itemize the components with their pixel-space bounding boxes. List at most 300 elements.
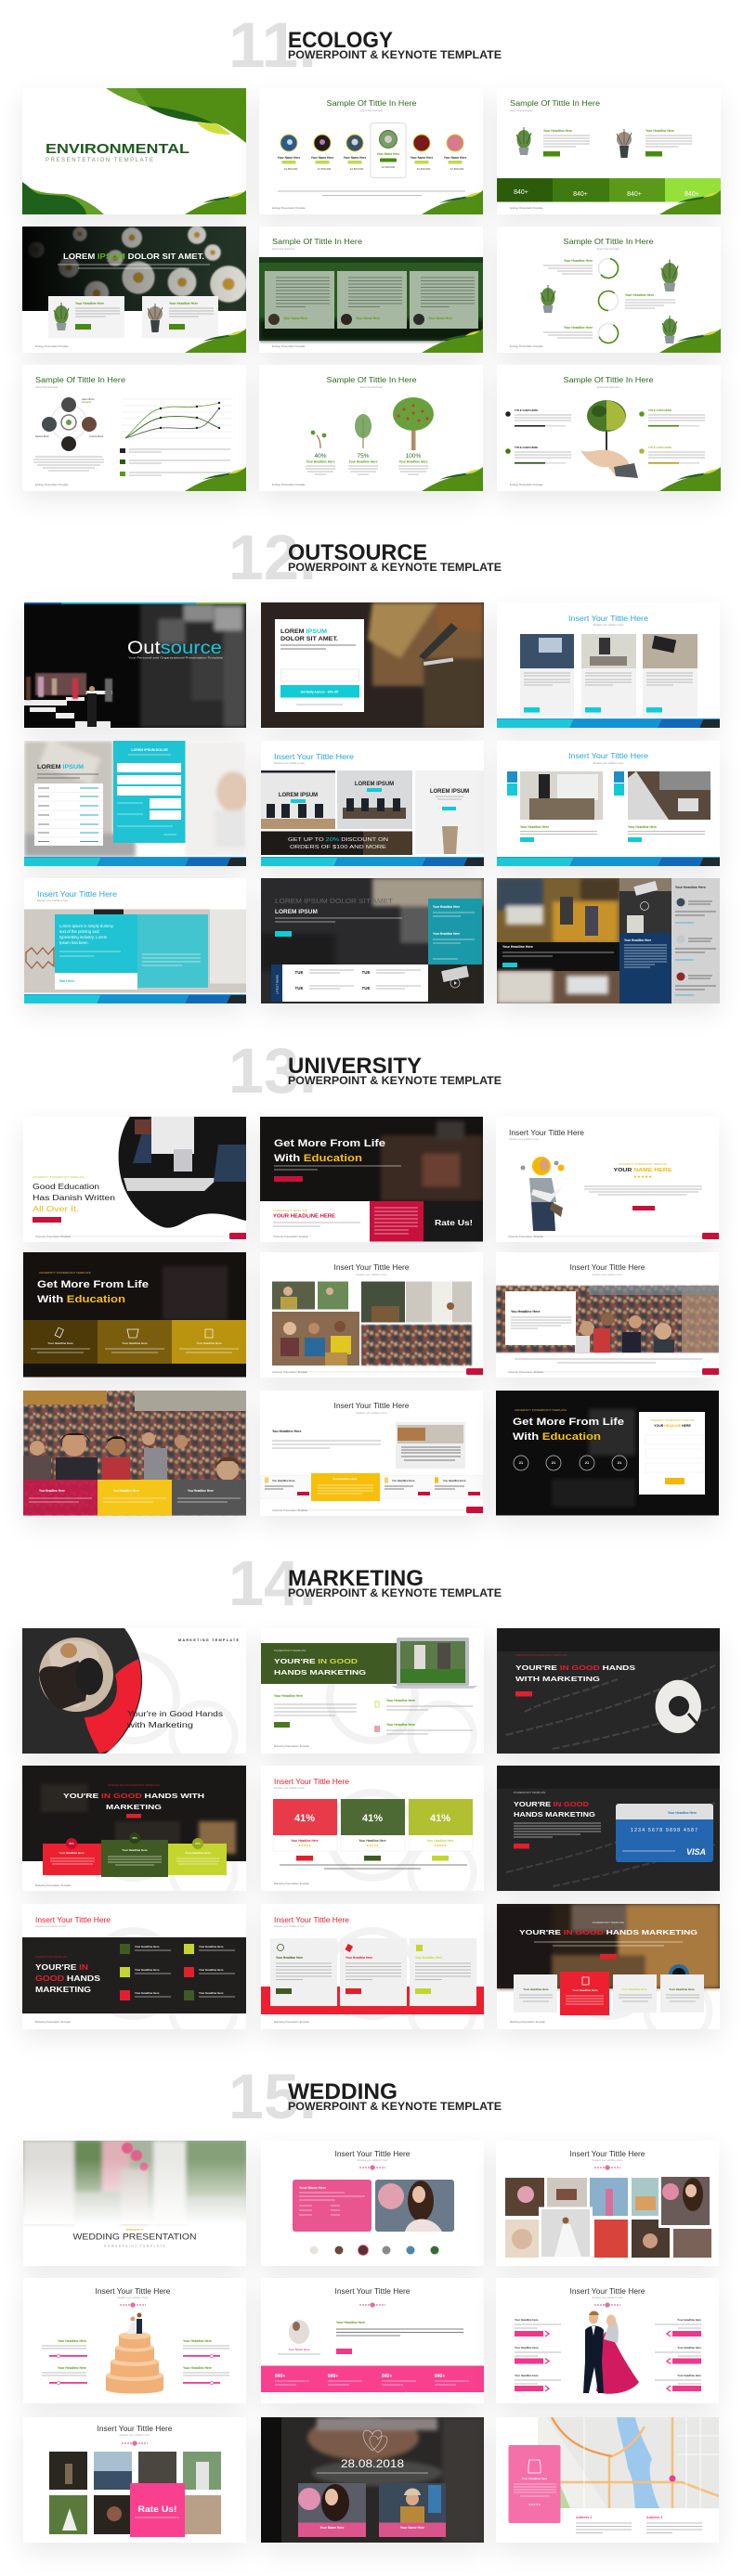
percentages (314, 453, 422, 460)
slide: tree growth: Insert Your Text Here (360, 385, 384, 389)
slide: countdown form: 21 (618, 1460, 622, 1465)
slide: desk photo cards: Marketing Presentation Template (509, 2020, 545, 2024)
logo: Out source (127, 639, 222, 658)
headline: YOU'RE IN GOOD HANDS WITH (63, 1792, 204, 1800)
addresses: Address 2 (646, 2516, 662, 2519)
ring notes: Your Headline Here (625, 293, 654, 297)
headline: LOREM IPSUM DOLOR SIT AMET. (63, 252, 204, 261)
couple illustration (583, 2311, 639, 2394)
headline: Get More From Life (513, 1417, 624, 1428)
rate us panel: Rate Us! (435, 1219, 473, 1227)
form card: YOUR HEADLINE HERE (654, 1424, 692, 1428)
navy column: Your Headline Here (624, 938, 651, 942)
headline: with Marketing (126, 1721, 193, 1729)
percentages: 40% (314, 453, 327, 460)
discount banner: ORDERS OF $100 AND MORE (290, 845, 386, 850)
right notes: Your Headline Here (183, 2339, 212, 2343)
cover subtitle: PRESENTETAION TEMPLATE (46, 158, 153, 163)
form panel: LOREM IPSUM DOLOR (131, 748, 168, 752)
slide: dark band icons: Replace your subtitle in here (35, 1924, 66, 1928)
title: Insert Your Tittle Here (37, 890, 118, 899)
photo 2 (337, 770, 412, 829)
left items: TITLE GOES HERE (515, 408, 538, 412)
daisy photo (22, 226, 247, 311)
green card: Your Headline Here (122, 1848, 148, 1852)
green banner: YOUR'RE IN GOOD (274, 1657, 358, 1665)
headline (33, 1183, 115, 1213)
colored panels: You Headline Here (188, 1489, 214, 1493)
team network: Adam Bush (82, 397, 95, 401)
left items: Your Headline Here (515, 2374, 539, 2377)
top strip (24, 602, 246, 604)
dark background (496, 1766, 719, 1891)
man figure (520, 1157, 565, 1231)
slide: laptop banner: Marketing Presentation Template (274, 1744, 309, 1748)
card 3: Your Headline Here (415, 1956, 442, 1960)
grey sidebar: Your Headline Here (675, 886, 706, 889)
photo 3 (415, 770, 484, 854)
pills (282, 158, 463, 163)
credit card: 1234 5678 9898 4587 (630, 1828, 697, 1833)
names: Your Name Here (444, 156, 467, 160)
slide: network and chart (22, 365, 246, 491)
left items (515, 2318, 561, 2391)
headline: Has Danish Written (33, 1194, 115, 1202)
captions (306, 460, 428, 464)
right items: TITLE GOES HERE (648, 446, 671, 449)
captions: Your Headline Here (358, 1839, 386, 1843)
gold panels: Your Headline Here (196, 1341, 222, 1345)
headline: YOUR'RE IN (35, 1963, 88, 1972)
title: Insert Your Tittle Here (95, 2287, 171, 2296)
headline: MARKETING (35, 1986, 91, 1994)
slide: bride profile: Replace your subtitle in here (358, 2158, 388, 2162)
magnifier (655, 1680, 700, 1733)
right items: Your Headline Here (677, 2318, 701, 2322)
welcome: Welcome to (126, 2228, 143, 2232)
title: Sample Of Tittle In Here (563, 238, 654, 246)
people on puzzle (24, 673, 112, 728)
headline (274, 1138, 385, 1164)
feature cards: You Headline Here (392, 1479, 415, 1482)
names (278, 152, 467, 160)
black caption: Your Headline Here (502, 945, 533, 949)
section: university (20, 1044, 723, 1528)
tagline: UNIVERSITY POWERPOINT TEMPLATE (39, 1271, 91, 1275)
news panel: TUE (295, 970, 303, 975)
right features: Your Headline Here (386, 1723, 415, 1727)
slide: photo collage: Replace your subtitle in here (357, 1273, 387, 1276)
slide: 41 percent tiles (261, 1766, 484, 1891)
ring charts (595, 257, 621, 346)
card row: Your Headline Here (621, 1987, 647, 1991)
dark photo (261, 878, 484, 1003)
slide: cake (23, 2278, 246, 2403)
left items: Your Headline Here (515, 2346, 539, 2349)
groom card (379, 2483, 446, 2537)
gold panels (23, 1320, 246, 1364)
blurred photo (24, 739, 250, 857)
text block (272, 1430, 381, 1448)
form panel (113, 741, 186, 843)
date: 28.08.2018 (341, 2457, 404, 2470)
headline: YOUR'RE IN GOOD (513, 1800, 589, 1808)
slide: hand holding tree: Ecology Presentation Template (510, 483, 543, 486)
left notes: Your Headline Here (58, 2366, 86, 2370)
desk photo (497, 878, 619, 943)
tagline: UNIVERSITY POWERPOINT TEMPLATE (515, 1408, 567, 1412)
slide: two photos (497, 741, 720, 866)
groom card: Your Name Here (400, 2526, 424, 2530)
portrait (278, 2320, 320, 2354)
ring notes: Your Headline Here (564, 326, 593, 330)
photo 1: LOREM IPSUM (279, 793, 318, 798)
video photo (428, 964, 482, 1002)
headline: YOUR'RE IN GOOD HANDS MARKETING (518, 1928, 697, 1936)
credit card: Your Headline Here (667, 1811, 697, 1815)
card 1 (270, 1938, 337, 2006)
tagline: UNIVERSITY POWERPOINT TEMPLATE (33, 1175, 85, 1179)
right items (639, 408, 705, 464)
framed dress (539, 2207, 593, 2259)
red quote (370, 1201, 424, 1242)
news panel: TUE (295, 986, 303, 990)
slide: progress rings: Insert Your Text Here (597, 247, 620, 251)
crowd photo (496, 1286, 719, 1353)
card row (513, 1972, 704, 2015)
left notes (42, 2339, 87, 2385)
captions (291, 1839, 454, 1847)
title: Insert Your Tittle Here (274, 753, 355, 761)
schedule table (34, 783, 103, 846)
signup card: LOREM IPSUM (280, 628, 327, 635)
buttons (296, 1856, 449, 1860)
title: Insert Your Tittle Here (274, 1778, 350, 1786)
prices (284, 165, 464, 171)
card 3 (410, 1938, 476, 2006)
plant right (617, 129, 632, 158)
slide: testimonials: Insert Your Text Here (272, 247, 295, 251)
green leaf top right (106, 88, 246, 143)
names: Your Name Here (377, 152, 400, 156)
slide: red band cards: Replace your subtitle in here (274, 1924, 305, 1928)
slide: credit card (496, 1766, 719, 1891)
right items: Your Headline Here (677, 2374, 701, 2377)
slide: team row: Ecology Presentation Template (272, 206, 306, 210)
stat strip: 840+ (573, 191, 588, 198)
avatars: Your Name Here (428, 317, 452, 320)
slide: man with book: Replace your subtitle in here (509, 1137, 540, 1141)
heading: 14 marketing: MARKETING (288, 1566, 424, 1591)
lime card: Your Headline Here (185, 1851, 211, 1855)
news panel: LATEST NEWS (275, 975, 279, 994)
heading: 12 outsource: OUTSOURCE (288, 540, 427, 565)
copy (336, 2321, 463, 2354)
icon captions: Your Headline Here (199, 1945, 224, 1948)
green banner (261, 1643, 397, 1684)
title: Insert Your Tittle Here (97, 2425, 173, 2433)
title: Sample Of Tittle In Here (563, 376, 654, 384)
slide: gallery (496, 2141, 719, 2266)
slide: progress rings (497, 227, 721, 353)
slide: blog layout (497, 878, 720, 1003)
slide: text and cards: Replace your subtitle in here (357, 1411, 387, 1415)
rate us panel (424, 1201, 483, 1242)
slide: latest news (261, 878, 484, 1003)
dark photo (260, 1117, 483, 1201)
name block: YOUR NAME HERE (613, 1168, 672, 1173)
heading: 15 wedding: POWERPOINT & KEYNOTE TEMPLATE (288, 2100, 502, 2113)
subtitle: Insert Your Text Here (360, 109, 384, 112)
slide: wedding cover (23, 2141, 246, 2266)
tree in hand (580, 400, 638, 478)
credit card: VISA (685, 1847, 706, 1857)
tagline: Your Personal and Organizational Presentation Template (128, 655, 223, 659)
feature cards: You Headline Here (443, 1479, 466, 1482)
left text (274, 1694, 357, 1728)
subtitle: POWERPOINT TEMPLATE (104, 2245, 165, 2248)
news panel (271, 964, 428, 1002)
cake tiers (106, 2332, 163, 2393)
headline: POWERPOINT TEMPLATE (35, 1955, 67, 1959)
headline: Get More From Life (274, 1138, 385, 1149)
profile circles (280, 130, 463, 151)
red band (261, 1987, 484, 2014)
heading: 13 university: UNIVERSITY (288, 1054, 422, 1079)
green banner: POWERPOINT TEMPLATE (274, 1649, 306, 1652)
heading: 12 outsource (228, 529, 502, 593)
photo 1 (261, 770, 335, 829)
captions: ★★★★★ (297, 1844, 311, 1847)
headline: POWERPOINT TEMPLATE (513, 1791, 545, 1794)
text block left: Your Headline Here (543, 129, 572, 133)
heading: 11 ecology: POWERPOINT & KEYNOTE TEMPLATE (288, 48, 502, 61)
slide: rate us (260, 1117, 483, 1242)
title: Insert Your Tittle Here (334, 1402, 410, 1410)
slide: environmental cover (22, 88, 246, 214)
cyan panel: Ipsum has been. (59, 940, 89, 945)
slide: audience with panels (23, 1391, 246, 1515)
right items: Your Headline Here (677, 2346, 701, 2349)
teal panel (428, 899, 482, 964)
form card: UNIVERSITY POWERPOINT TEMPLATE (650, 1418, 695, 1422)
slide: man with book (496, 1117, 719, 1242)
quote cards (265, 271, 478, 329)
pink card (293, 2180, 372, 2232)
captions: Your Headline Here (306, 460, 335, 464)
icon captions: Your Headline Here (135, 1945, 160, 1948)
prices: 12.500.000 (318, 167, 332, 171)
bride photo (375, 2180, 454, 2232)
card 2 (142, 296, 218, 338)
line chart (122, 399, 232, 438)
avatars: Your Name Here (356, 317, 380, 320)
captions: Your Headline Here (520, 825, 549, 829)
slide: laptop banner (261, 1628, 484, 1754)
news panel: TUE (362, 970, 370, 975)
heading: 14 marketing: POWERPOINT & KEYNOTE TEMPLATE (288, 1586, 502, 1599)
photo blob (119, 1117, 246, 1228)
slide: overlapping panels (24, 878, 246, 1003)
feature cards: You Headline Here (272, 1479, 295, 1482)
captions: ★★★★★ (433, 1844, 447, 1847)
faint ring (91, 1655, 235, 1767)
card 1: Your Headline Here (276, 1956, 303, 1960)
slide: date (261, 2417, 484, 2543)
signup card: DOLOR SIT AMET. (280, 636, 338, 642)
avatars (268, 314, 452, 325)
left notes: Your Headline Here (58, 2339, 86, 2343)
tagline: MARKETING TEMPLATE (178, 1638, 239, 1642)
plant left (516, 127, 531, 155)
section: wedding (20, 2070, 723, 2555)
sapling (355, 414, 372, 448)
green banner: HANDS MARKETING (274, 1668, 366, 1676)
green card: 98% (132, 1836, 137, 1840)
headline (35, 1955, 101, 1994)
lower photo (497, 971, 619, 1003)
title: Insert Your Tittle Here (570, 2150, 645, 2158)
pink band: 840+ (275, 2374, 285, 2379)
slide: 41 percent tiles: Marketing Presentation Template (274, 1882, 309, 1885)
names: Your Name Here (344, 156, 367, 160)
discount banner (261, 832, 412, 855)
headline: GOOD HANDS (35, 1974, 101, 1983)
floral dark photo (261, 2415, 484, 2543)
right items (655, 2318, 701, 2391)
ring notes: Your Headline Here (564, 259, 593, 263)
slide: hand holding tree: Insert Your Text Here (597, 385, 620, 389)
feature cards: You Headline Here (332, 1477, 358, 1481)
white card: You Headline Here (511, 1310, 541, 1314)
title: Sample Of Tittle In Here (327, 99, 416, 108)
desk photo (261, 602, 484, 728)
heading: LOREM IPSUM (37, 764, 84, 770)
crowd photo (23, 1391, 246, 1515)
slide: countdown form: 21 (552, 1460, 556, 1465)
card 2: Your Headline Here (345, 1956, 372, 1960)
black caption (497, 942, 619, 971)
title: Insert Your Tittle Here (334, 2287, 411, 2296)
signup card: Get Early Access - 10% Off (301, 691, 339, 694)
tile cards (273, 1799, 473, 1851)
slide: bride and groom (496, 2278, 719, 2403)
right notes (183, 2339, 229, 2385)
red card: 85% (69, 1842, 74, 1845)
framed bride (658, 2174, 712, 2228)
addresses (576, 2516, 702, 2532)
prices: 12.500.000 (417, 167, 431, 171)
icon captions (135, 1945, 224, 1995)
tagline: MARKETING POWERPOINT TEMPLATE (515, 1653, 567, 1657)
title: Insert Your Tittle Here (568, 752, 649, 760)
slide: pink stat band (261, 2278, 484, 2403)
names: Your Name Here (411, 156, 434, 160)
slide: magnifier: WITH MARKETING (515, 1675, 600, 1683)
slide: red band cards (261, 1904, 484, 2029)
slide: team row (259, 88, 483, 214)
title: Insert Your Tittle Here (568, 615, 649, 623)
red crescent (85, 1659, 141, 1754)
slide: hand holding tree (497, 365, 721, 491)
prices: 12.500.000 (450, 167, 464, 171)
slide: map (496, 2417, 719, 2543)
heading: 14 marketing (228, 1555, 502, 1619)
dark background (496, 1391, 719, 1515)
text block right: Your Headline Here (645, 129, 674, 133)
news panel: TUE (362, 986, 370, 990)
slide: outsource cover (24, 602, 246, 728)
highlighted card (371, 123, 406, 178)
card 1 (48, 296, 124, 338)
captions: Your Headline Here (291, 1839, 319, 1843)
teal panel: Your Headline Here (433, 932, 460, 936)
couple topper (127, 2313, 142, 2334)
addresses: Address 1 (576, 2516, 592, 2519)
slide: countdown form (496, 1391, 719, 1515)
photo right (628, 771, 710, 820)
percentages (294, 1813, 450, 1824)
pink band (261, 2365, 484, 2392)
slide: three cards: Replace your subtitle in here (593, 623, 624, 627)
countdown circles (514, 1456, 627, 1470)
tagline: MARKETING POWERPOINT TEMPLATE (108, 1783, 160, 1787)
captions: ★★★★★ (365, 1844, 379, 1847)
portrait: Your Name Here (288, 2348, 310, 2351)
rate us card: Rate Us! (137, 2505, 176, 2514)
slide: countdown form: 21 (585, 1460, 590, 1465)
bride card (298, 2483, 366, 2537)
percentages: 41% (294, 1813, 315, 1824)
title: Sample Of Tittle In Here (510, 99, 600, 108)
team network: Designer (82, 400, 92, 404)
pink band: 840+ (435, 2374, 445, 2379)
team network: Jessica Bush (89, 434, 104, 438)
headline: With Education (513, 1431, 601, 1443)
slide: rate us: University Presentation Template (273, 1235, 308, 1238)
heading: 13 university (228, 1044, 502, 1107)
headline (513, 1791, 600, 1849)
slide: dark band icons: Marketing Presentation Template (35, 2020, 71, 2024)
heading: 15 wedding (228, 2070, 502, 2132)
slide: progress rings: Ecology Presentation Template (510, 344, 543, 348)
signup card (275, 619, 364, 712)
slide: daisies: Ecology Presentation Template (35, 344, 69, 348)
title: Insert Your Tittle Here (274, 1916, 350, 1924)
percentages: 41% (362, 1813, 383, 1824)
cover title: ENVIRONMENTAL (46, 141, 189, 157)
slide: gold panels (23, 1252, 246, 1378)
stat strip: 840+ (627, 191, 642, 198)
slide: cake: Replace your subtitle in here (118, 2296, 149, 2299)
translucent panel (137, 914, 208, 988)
title: Insert Your Tittle Here (35, 1916, 111, 1924)
slide: 41 percent tiles: Replace your subtitle in here (274, 1786, 305, 1790)
title: Sample Of Tittle In Here (35, 376, 125, 384)
gold panels: Your Headline Here (47, 1341, 73, 1345)
headline: All Over It. (33, 1205, 79, 1213)
headline (126, 1710, 223, 1729)
slide: dark band icons (22, 1904, 246, 2029)
form card (639, 1412, 705, 1495)
slide: tree growth (259, 365, 483, 491)
slide: countdown form: 21 (519, 1460, 524, 1465)
title: Sample Of Tittle In Here (327, 376, 416, 384)
left items (505, 408, 571, 464)
headline: YOUR'RE IN GOOD HANDS (515, 1663, 635, 1672)
slide: testimonials: Ecology Presentation Template (272, 344, 306, 348)
pink address card: ★★★★★ (528, 2503, 541, 2506)
